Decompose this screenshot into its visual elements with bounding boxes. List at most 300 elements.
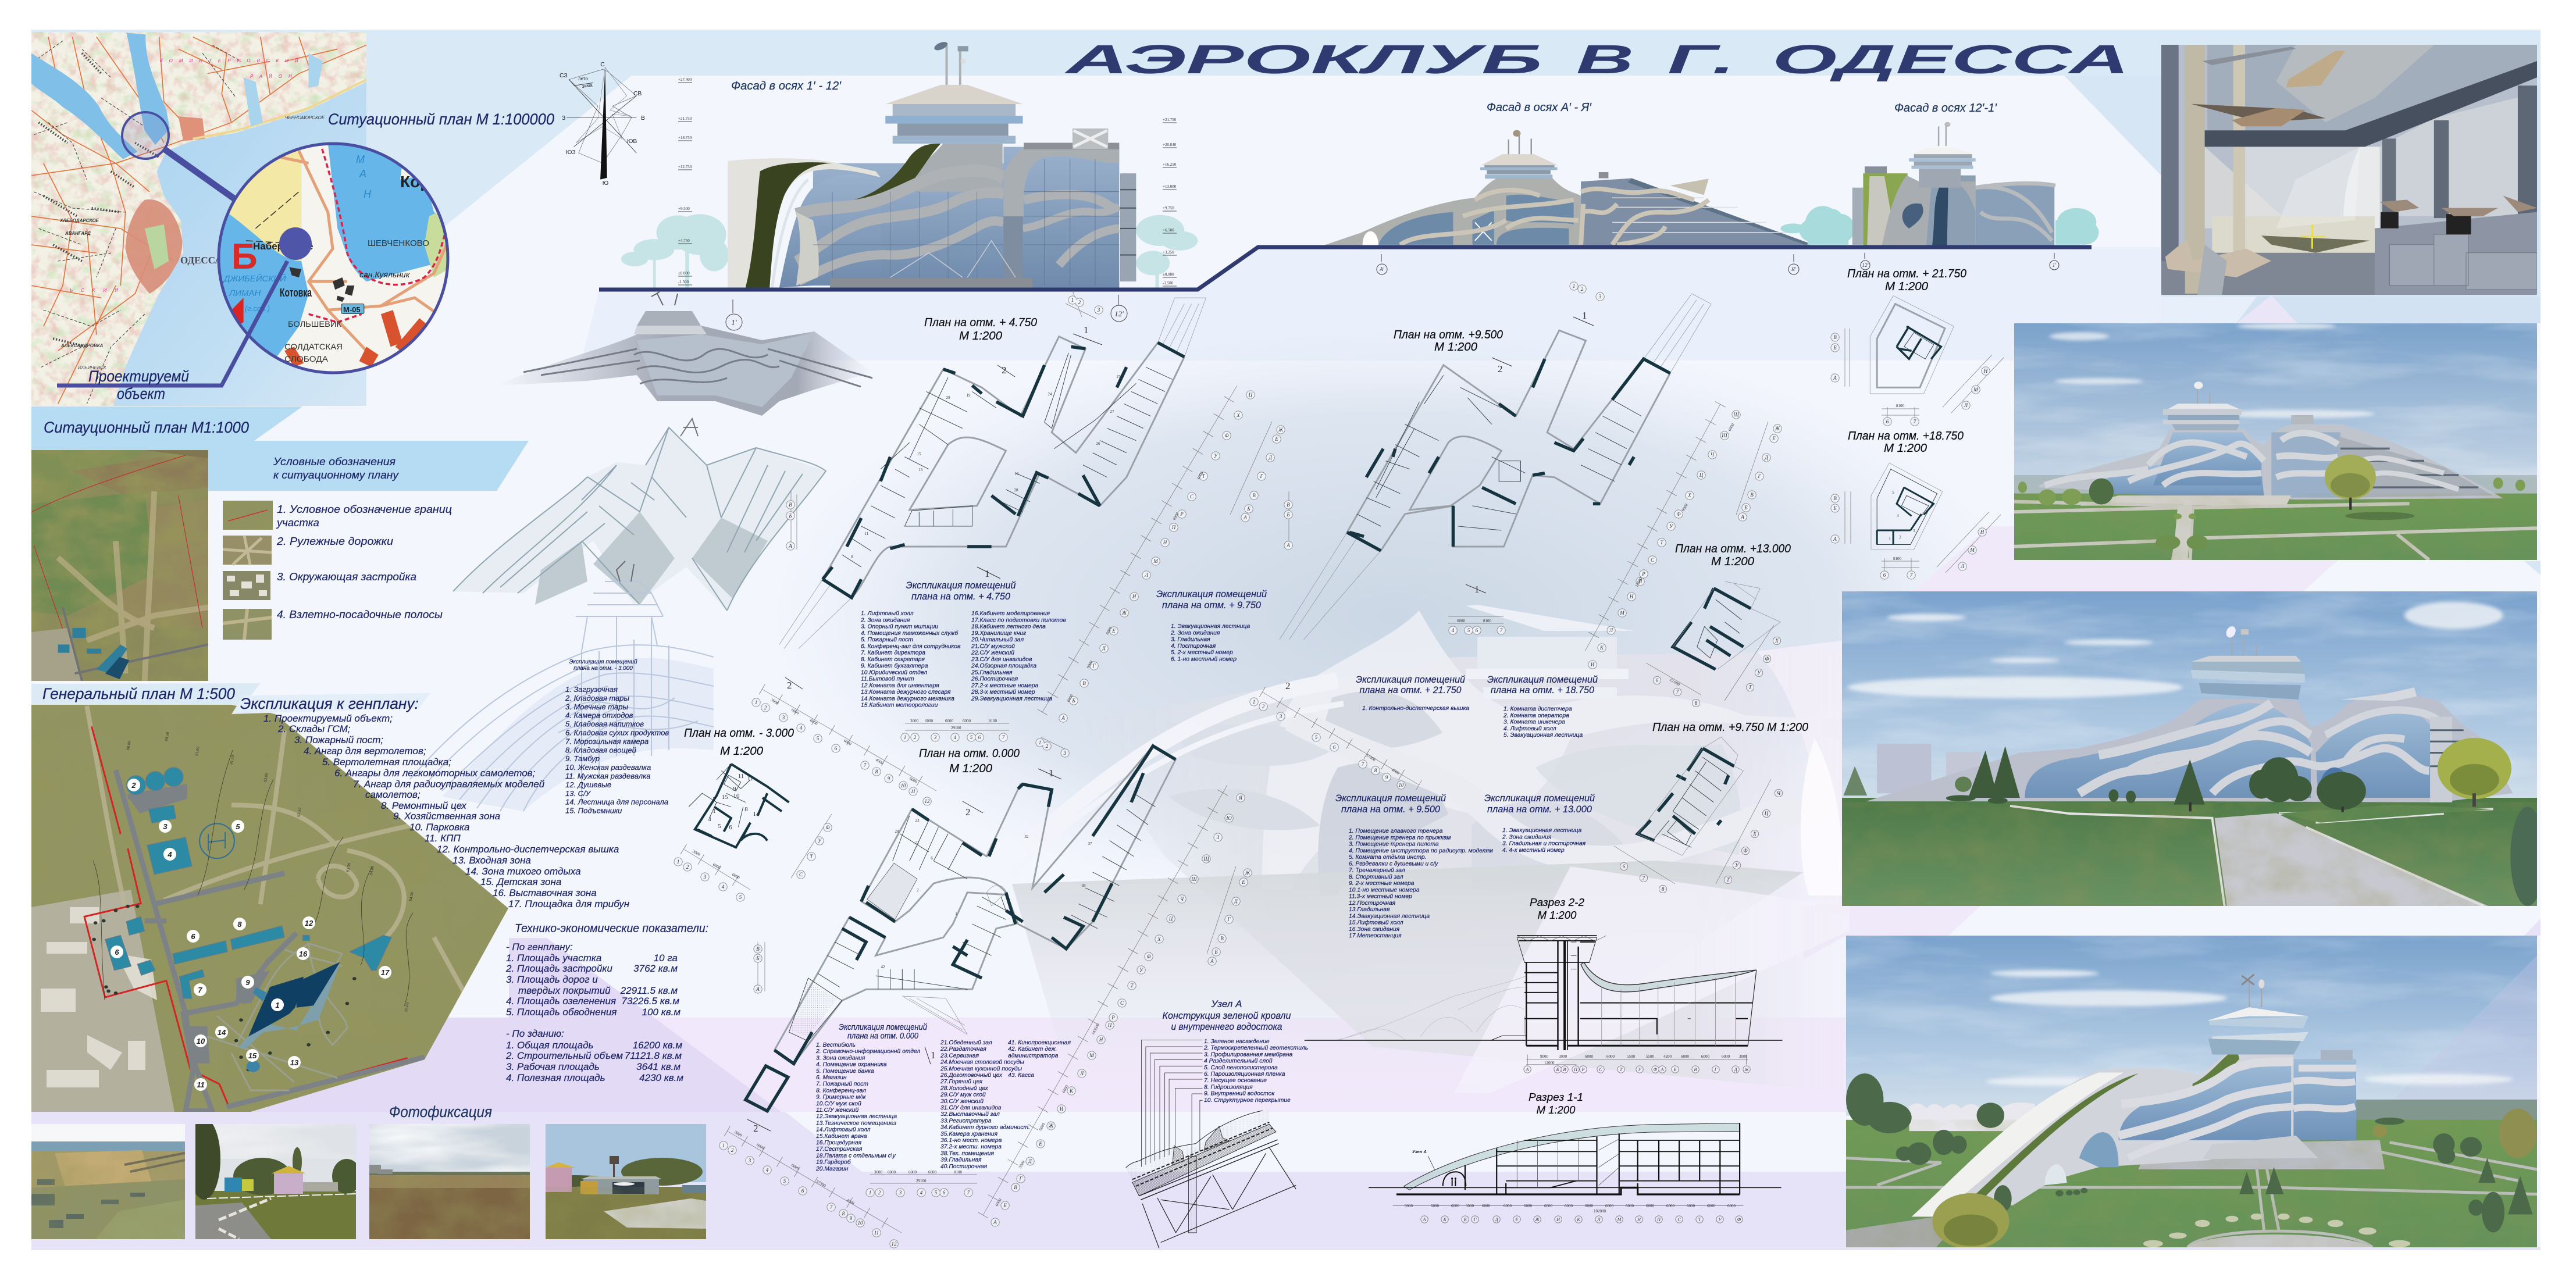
axes: 6000 bbox=[963, 719, 971, 723]
axes: 10 bbox=[1398, 782, 1404, 788]
list: 17. Площадка для трибун bbox=[508, 898, 630, 909]
explication +18.750 bbox=[1487, 674, 1598, 738]
axes: 9000 bbox=[1405, 1204, 1413, 1208]
indicator values: 4230 кв.м bbox=[639, 1072, 683, 1083]
room numbers: 24 bbox=[1048, 392, 1052, 397]
axes: АБВГДЕЖИКЛМНПРСТУФХЦЧШЩЗЮЯ bbox=[993, 795, 1243, 1225]
explication -3.000: 2. Кладовая тары bbox=[565, 694, 630, 702]
axes: 3000 bbox=[733, 1130, 743, 1138]
explication +4.750: Экспликация помещений bbox=[906, 580, 1016, 591]
level marks: +21.750 bbox=[1163, 117, 1177, 122]
wind rose: СВ bbox=[633, 91, 642, 97]
layer list: 4 Разделительный слой bbox=[1204, 1058, 1273, 1065]
list column 2: 17.Класс по подготовки пилотов bbox=[971, 617, 1066, 623]
axes: 12345СТУФ bbox=[677, 825, 830, 900]
room numbers: 5 bbox=[1892, 490, 1894, 495]
explication +13.000 bbox=[1484, 793, 1595, 854]
section markers: 1 bbox=[1049, 768, 1054, 779]
layer list: 7. Несущее основание bbox=[1204, 1078, 1267, 1084]
aerial base with site plan: 82.00 bbox=[263, 772, 269, 782]
list: 5. Вертолетная площадка; bbox=[322, 757, 451, 768]
list column 1: 8. Кабинет секретаря bbox=[861, 656, 925, 663]
explication +13.000: 1. Эвакуационная лестница bbox=[1502, 827, 1582, 834]
floor plan -3.000 bbox=[677, 726, 832, 900]
list: 16. Выставочная зона bbox=[493, 887, 597, 898]
indicator labels: 1. Площадь участка bbox=[506, 952, 601, 964]
explication +13.000: 4. 4-х местный номер bbox=[1502, 847, 1565, 854]
heading bbox=[919, 747, 1020, 775]
list column 1: 15.Кабинет врача bbox=[816, 1133, 867, 1140]
icon: site marker with leader line bbox=[57, 227, 312, 386]
zoomed map circle: А bbox=[359, 168, 366, 180]
floor plan +13.000 bbox=[1646, 542, 1791, 706]
numbered badges: 4 bbox=[167, 850, 172, 859]
axes bbox=[1526, 1054, 1749, 1072]
axes: АБВПРСТУФАБВГДЖ bbox=[1526, 1067, 1749, 1072]
layer list: 8. Гидроизоляция bbox=[1204, 1084, 1253, 1090]
axes: 6000 bbox=[1585, 1054, 1594, 1059]
level marks: +16.250 bbox=[1163, 162, 1177, 167]
zoomed map circle: сан.Куяльник bbox=[359, 270, 411, 279]
axes: 6000 bbox=[1626, 1204, 1634, 1208]
aerial base with site plan: 81.50 bbox=[229, 755, 236, 765]
list column 2: 35.Камера хранения bbox=[940, 1131, 998, 1137]
room numbers: 2 bbox=[712, 796, 716, 803]
layer list: 1. Зеленое насаждение bbox=[1204, 1039, 1270, 1045]
room numbers: 15 bbox=[721, 794, 728, 801]
facade axis markers: 1′ bbox=[2053, 262, 2057, 268]
level marks bbox=[678, 77, 1177, 286]
list column 1: 14.Лифтовый холл bbox=[816, 1126, 871, 1133]
axes: 8100 bbox=[989, 719, 997, 723]
explication +18.750: 4. Лифтовый холл bbox=[1503, 725, 1556, 732]
aerial base with site plan bbox=[31, 705, 508, 1112]
axes: 6000 bbox=[1544, 1204, 1553, 1208]
list column 2: 37.2-х мести. номера bbox=[940, 1144, 1002, 1150]
list column 1: 3. Опорный пункт милиции bbox=[861, 623, 938, 630]
numbered badges: 6 bbox=[191, 932, 195, 941]
photo 1: aerial bbox=[31, 1124, 185, 1239]
axes: 10 bbox=[857, 1220, 863, 1226]
room numbers bbox=[708, 773, 760, 831]
axes: 6000 bbox=[1451, 1204, 1460, 1208]
list column 1: 2. Справочно-информационнй отдел bbox=[815, 1048, 920, 1055]
list column 2: 16.Кабинет моделирования bbox=[971, 610, 1050, 617]
explication -3.000: 8. Кладовая овощей bbox=[565, 745, 636, 754]
list: 14. Зона тихого отдыха bbox=[465, 866, 581, 877]
indicator labels: 4. Полезная площадь bbox=[506, 1072, 605, 1083]
list: 10. Парковка bbox=[409, 822, 469, 833]
axes: 11 bbox=[874, 1230, 879, 1236]
heading bbox=[1530, 896, 1585, 921]
list column 1: 14.Комната дежурного механика bbox=[861, 695, 954, 702]
indicator labels: 3. Рабочая площадь bbox=[506, 1061, 600, 1072]
indicator values: 73226.5 кв.м bbox=[622, 996, 679, 1007]
list column 1: 7. Кабинет директора bbox=[861, 649, 925, 656]
facade drawing bbox=[1323, 130, 1848, 246]
explication +13.000: Экспликация помещений bbox=[1484, 793, 1595, 804]
axes: 9000 bbox=[1540, 1054, 1548, 1059]
axes: 1234567 bbox=[904, 734, 1005, 740]
isometric view 2 bbox=[453, 419, 826, 611]
zoomed map circle: ШЕВЧЕНКОВО bbox=[368, 238, 429, 248]
legend text: 1. Условное обозначение границ bbox=[277, 503, 452, 515]
explication +18.750: плана на отм. + 18.750 bbox=[1491, 684, 1595, 695]
indicator labels: 1. Общая площадь bbox=[506, 1040, 593, 1051]
wind rose: З bbox=[562, 115, 565, 122]
list column 1: 10.С/У муж ской bbox=[816, 1101, 861, 1107]
title: АЭРОКЛУБ bbox=[1064, 37, 1542, 82]
list column 1: 4. Помещения таможенных служб bbox=[861, 630, 959, 637]
explication -3.000: 7. Морозильная камера bbox=[565, 737, 649, 745]
explication +4.750: плана на отм. + 4.750 bbox=[911, 591, 1011, 602]
map labels: ИЛЬИЧЕВСК bbox=[78, 365, 107, 370]
axes: 6000 bbox=[1701, 1054, 1710, 1059]
explication +18.750: Экспликация помещений bbox=[1487, 674, 1598, 685]
facade drawing bbox=[1805, 122, 2099, 245]
zoomed map circle: СЛОБОДА bbox=[284, 354, 329, 363]
explication -3.000: 6. Кладовая сухих продуктов bbox=[565, 728, 669, 737]
map labels: ЬСКИЙ bbox=[70, 288, 126, 293]
list column 2: 40.Постирочная bbox=[940, 1164, 988, 1170]
axes bbox=[755, 291, 1284, 804]
indicator values: 10 га bbox=[654, 952, 678, 964]
axes: 6000 bbox=[731, 872, 741, 880]
list column 2: 27.2-х местные номера bbox=[971, 683, 1039, 689]
axes: 123 bbox=[1573, 283, 1602, 299]
heading: М 1:200 bbox=[959, 329, 1003, 342]
level marks: +27.400 bbox=[678, 77, 692, 82]
facade base line bbox=[599, 247, 2092, 290]
explication +9.750: Экспликация помещений bbox=[1156, 588, 1267, 600]
list bbox=[263, 713, 630, 909]
heading banner: Экспликация к генплану: bbox=[240, 695, 419, 712]
zoomed map circle: БОЛЬШЕВИК bbox=[288, 319, 342, 329]
heading: Конструкция зеленой кровли bbox=[1162, 1010, 1291, 1021]
axes: 102000 bbox=[1594, 1209, 1606, 1214]
list column 1: 16.Процедурная bbox=[816, 1140, 862, 1146]
axes: 6000 bbox=[1681, 1054, 1689, 1059]
swatch 2: taxiways bbox=[223, 536, 272, 565]
explication +9.500: 6. Раздевалки с душевыми и с/у bbox=[1349, 861, 1438, 867]
facade 12-1 bbox=[1805, 101, 2099, 245]
axes: 8100 bbox=[1893, 556, 1902, 561]
explication -3.000: 3. Моечные тары bbox=[565, 702, 628, 711]
isometric view 3 bbox=[410, 561, 714, 811]
axes: 4200 bbox=[1663, 1054, 1672, 1059]
room numbers bbox=[851, 374, 1121, 559]
explication +13.000: плана на отм. + 13.000 bbox=[1487, 804, 1592, 815]
plan drawing bbox=[1871, 463, 1943, 550]
swatch 1: site boundary bbox=[223, 501, 273, 530]
heading: М 1:200 bbox=[1885, 280, 1929, 293]
numbered badges: 10 bbox=[197, 1037, 205, 1046]
list column 2: 21.Обеденный зал bbox=[940, 1039, 992, 1046]
heading bbox=[1529, 1091, 1583, 1116]
explication +9.750 bbox=[1156, 588, 1267, 662]
explication +9.750: 5. 2-х местный номер bbox=[1171, 650, 1233, 656]
room numbers: 1 bbox=[955, 911, 957, 916]
explication +9.750: 3. Гладильная bbox=[1171, 636, 1210, 643]
heading: М 1:200 bbox=[720, 744, 764, 758]
axes: ЖЕДГВБА bbox=[1210, 870, 1250, 964]
numbered badges: 15 bbox=[248, 1051, 257, 1060]
axes: 6000 bbox=[1687, 1204, 1695, 1208]
room numbers: 15 bbox=[919, 468, 923, 472]
section markers: 1 bbox=[985, 568, 990, 579]
heading: План на отм. 0.000 bbox=[919, 747, 1020, 760]
explication -3.000: 14. Лестница для персонала bbox=[565, 798, 668, 807]
axes: 6000 bbox=[1646, 1204, 1654, 1208]
axes: 6000 bbox=[928, 1170, 936, 1175]
level marks: +13.000 bbox=[1163, 184, 1177, 189]
explication -3.000: 12. Душевые bbox=[565, 780, 611, 789]
numbered badges: 1 bbox=[275, 1001, 280, 1009]
axes: 3000 bbox=[910, 719, 919, 723]
axes: 5500 bbox=[1627, 1054, 1636, 1059]
floor plan +18.750 bbox=[1833, 429, 2001, 578]
section markers: 2 bbox=[1002, 365, 1006, 376]
list column 2: 32.Выставочный зал bbox=[940, 1111, 1000, 1118]
axes: АБВГДЕЖИКЛМНПСТУФ bbox=[1423, 1217, 1741, 1222]
heading: М 1:200 bbox=[1884, 441, 1927, 455]
heading: и внутреннего водостока bbox=[1171, 1021, 1282, 1032]
explication +21.750: плана на отм. + 21.750 bbox=[1360, 684, 1462, 695]
axes: 3000 bbox=[1018, 1159, 1026, 1169]
floor plan +4.750 bbox=[755, 291, 1284, 804]
axes: 3000 bbox=[770, 698, 780, 706]
list column 2: 23.Сервизная bbox=[940, 1052, 979, 1059]
list column 1: 12.Комната для инвентаря bbox=[861, 683, 939, 689]
heading: situation plan 1:100000: Ситуационный план М 1:100000 bbox=[328, 110, 554, 128]
section drawing bbox=[1369, 1123, 1782, 1205]
explication +13.000: 2. Зона ожидания bbox=[1502, 834, 1552, 840]
axes: 12356789 bbox=[1253, 699, 1388, 780]
aerial base with site plan: 81.00 bbox=[194, 746, 201, 756]
axes: 123 bbox=[1039, 740, 1067, 756]
list column 2: 39.Гладильная bbox=[940, 1157, 982, 1164]
zoomed map circle: Б bbox=[231, 237, 258, 277]
map base bbox=[31, 32, 366, 406]
axes: 4567 bbox=[1452, 627, 1503, 633]
room numbers: 2 bbox=[1899, 535, 1901, 540]
zoomed map circle: М-05 bbox=[343, 305, 361, 314]
axes: 6000 bbox=[712, 862, 722, 870]
list column 2: 22.С/У женский bbox=[971, 650, 1014, 656]
detail node A bbox=[1125, 998, 1308, 1248]
axes bbox=[722, 737, 1250, 1247]
room numbers: 2 bbox=[917, 888, 919, 893]
room numbers: 16 bbox=[1014, 472, 1019, 476]
photo 3: field bbox=[369, 1124, 530, 1239]
list column 2: 24.Моечная столовой посуды bbox=[940, 1059, 1024, 1066]
facade 1-12 bbox=[621, 40, 1198, 288]
explication -3.000: Экспликация помещений bbox=[569, 659, 637, 665]
title: ОДЕССА bbox=[1772, 37, 2129, 82]
map labels: РАЙОН bbox=[250, 74, 298, 79]
axes: 6000 bbox=[908, 1170, 917, 1175]
axes: 3000 bbox=[874, 1170, 883, 1175]
explication +9.750: 4. Постирочная bbox=[1171, 643, 1216, 650]
axes: 12 bbox=[925, 798, 930, 804]
zoomed map circle bbox=[212, 139, 455, 379]
swatch 3: surrounding buildings bbox=[223, 571, 270, 600]
room numbers: 29 bbox=[946, 395, 950, 400]
explication +18.750: 3. Комната инженера bbox=[1503, 719, 1565, 726]
list: 1. Проектируемый объект; bbox=[263, 713, 393, 724]
explication +9.500: 9. 2-х местные номера bbox=[1349, 880, 1415, 887]
heading bbox=[1394, 328, 1503, 354]
axes: 123 bbox=[1071, 297, 1100, 313]
title bbox=[1064, 37, 2129, 82]
room numbers: 19 bbox=[967, 393, 971, 398]
heading: План на отм. - 3.000 bbox=[684, 726, 794, 740]
numbered badges: 12 bbox=[305, 919, 313, 927]
heading: План на отм. +9.750 М 1:200 bbox=[1652, 720, 1809, 734]
axes: 6000 bbox=[790, 708, 800, 716]
heading: М 1:200 bbox=[1711, 555, 1755, 568]
explication +9.500: 13.Гладильная bbox=[1349, 907, 1390, 913]
axes: 57300 bbox=[1365, 753, 1377, 762]
axes: 6000 bbox=[1727, 1204, 1736, 1208]
explication -3.000: 11. Мужская раздевалка bbox=[565, 772, 650, 780]
indicator labels: твердых покрытий bbox=[518, 985, 611, 996]
room numbers: 27 bbox=[1110, 409, 1114, 414]
explication +9.750: 6. 1-но местный номер bbox=[1171, 656, 1237, 662]
numbered badges: 9 bbox=[245, 978, 250, 987]
room numbers: 28 bbox=[895, 829, 899, 834]
room numbers: 6 bbox=[729, 824, 732, 831]
axes: 29100 bbox=[916, 1179, 927, 1183]
title: В bbox=[1576, 37, 1634, 82]
banner: general plan heading: Генеральный план М 1:500 bbox=[42, 685, 235, 702]
level marks: ±0.000 bbox=[1163, 272, 1174, 277]
axes: 8100 bbox=[954, 1170, 962, 1175]
axes: 123456789 bbox=[722, 1143, 853, 1221]
room numbers: 11 bbox=[747, 775, 753, 782]
list column 2: 38.Тех. помещения bbox=[940, 1150, 994, 1157]
plan drawing bbox=[1673, 581, 1780, 669]
label: project site: Проектируемй bbox=[88, 368, 189, 385]
indicator values: 100 кв.м bbox=[642, 1007, 680, 1018]
explication -3.000: 10. Женская раздевалка bbox=[565, 763, 651, 772]
legend text bbox=[276, 503, 452, 620]
list column 2: 21.С/У мужской bbox=[971, 643, 1015, 650]
explication +9.500: 10.1-но местные номера bbox=[1349, 887, 1420, 893]
heading: М 1:200 bbox=[1537, 1104, 1576, 1116]
layer list: 2. Термоскрепеленный геотекстиль bbox=[1203, 1045, 1308, 1051]
room numbers: 42 bbox=[881, 965, 885, 969]
render: main view bbox=[1842, 591, 2537, 906]
section markers bbox=[785, 324, 1102, 691]
wind rose: С bbox=[600, 62, 605, 68]
list column 1: 2. Зона ожидания bbox=[860, 617, 910, 623]
explication +4.750 bbox=[860, 580, 1066, 708]
explication +9.500: 2. Помещение тренера по прыжкам bbox=[1348, 834, 1451, 841]
technical and economic indicators: Технико-экономические показатели: bbox=[515, 922, 708, 935]
level marks: -1.500 bbox=[678, 280, 689, 284]
room numbers: 3 bbox=[1913, 529, 1915, 533]
room numbers: 32 bbox=[1025, 834, 1029, 839]
list: 6. Ангары для легкомоторных самолетов; bbox=[334, 768, 536, 779]
room numbers bbox=[863, 818, 1092, 1039]
axes: 12.000 bbox=[1669, 677, 1681, 687]
floor plan +9.500 bbox=[1253, 283, 1780, 788]
map labels: КОМИНТЕРНОВСКИЙ bbox=[160, 58, 305, 63]
wind rose: ЮВ bbox=[627, 138, 637, 145]
explication -3.000: 5. Кладовая напитков bbox=[565, 720, 644, 729]
axes: 6000 bbox=[1038, 1122, 1046, 1132]
list column 3: администратора bbox=[1008, 1052, 1059, 1059]
panel: general plan bbox=[31, 683, 508, 1112]
axes: 6000 bbox=[1482, 1204, 1490, 1208]
axes: 4500 bbox=[846, 1198, 856, 1206]
explication +21.750 bbox=[1356, 674, 1469, 712]
section markers: 2 bbox=[787, 680, 792, 691]
indicator labels: 2. Строительный объем bbox=[505, 1050, 623, 1061]
banner: situation plan 1:1000 and legend: Условные обозначения bbox=[273, 455, 396, 468]
plan drawing bbox=[689, 764, 789, 847]
list column 3: 41. Кинопроекционная bbox=[1008, 1040, 1071, 1046]
heading: М 1:200 bbox=[1538, 909, 1577, 921]
room numbers: 14 bbox=[753, 811, 760, 818]
aerial base with site plan: 80.00 bbox=[126, 740, 132, 750]
list column 1: 8. Конференц-зал bbox=[816, 1087, 866, 1094]
plan drawing bbox=[1870, 296, 1954, 394]
list: 4. Ангар для вертолетов; bbox=[304, 745, 426, 757]
room numbers: 1 bbox=[712, 808, 716, 815]
list: 3. Пожарный пост; bbox=[294, 734, 383, 745]
list column 1: 10.Юридический отдел bbox=[861, 669, 927, 676]
section markers bbox=[1285, 310, 1594, 691]
list column 1: 11.Бытовой пункт bbox=[861, 676, 914, 683]
panel: aerial photo 1:1000 bbox=[31, 450, 208, 681]
explication +9.500: 1. Помещение главного тренера bbox=[1349, 828, 1443, 834]
aerial base with site plan: 80.50 bbox=[164, 732, 170, 741]
heading: План на отм. +18.750 bbox=[1848, 429, 1964, 443]
list: 7. Ангар для радиоуправляемых моделей bbox=[353, 779, 545, 790]
level marks: +12.750 bbox=[678, 165, 692, 169]
explication +9.500: 17.Метеостанция bbox=[1349, 933, 1402, 939]
axes: 6000 bbox=[888, 1170, 896, 1175]
explication +9.500: 3. Помещение тренера пилота bbox=[1349, 841, 1439, 848]
list: 11. КПП bbox=[425, 833, 461, 844]
layer list: 9. Внутренний водосток bbox=[1204, 1091, 1275, 1097]
room numbers: 5 bbox=[718, 823, 721, 830]
banner: situation plan 1:1000 and legend: к ситуационному плану bbox=[273, 469, 400, 481]
room numbers: 26 bbox=[1096, 441, 1100, 446]
section markers: 2 bbox=[1498, 363, 1503, 374]
axes: 3000 bbox=[1559, 1054, 1567, 1059]
level marks: +9.750 bbox=[1163, 206, 1174, 210]
axes: 143500 bbox=[1091, 1022, 1100, 1036]
room numbers: 23 bbox=[915, 818, 920, 823]
axes: 6000 bbox=[1066, 693, 1074, 703]
list: 13. Входная зона bbox=[453, 855, 531, 866]
explication +9.500: 5. Комната отдыха инстр. bbox=[1349, 854, 1426, 861]
layer list: 10. Структурное перекрытие bbox=[1204, 1097, 1291, 1104]
axes: 8100 bbox=[1483, 619, 1491, 623]
explication +9.500: 7. Тренажерный зал bbox=[1349, 868, 1405, 873]
aerial base with site plan: 84.50 bbox=[408, 891, 415, 901]
legend text: 3. Окружающая застройка bbox=[277, 570, 416, 583]
list: 2. Склады ГСМ; bbox=[277, 723, 351, 734]
axes bbox=[1405, 1204, 1741, 1222]
explication +9.750: 1. Эвакуационная лестница bbox=[1171, 623, 1250, 630]
axes: 10 bbox=[900, 783, 906, 789]
axes: 6000 bbox=[1086, 659, 1094, 669]
floor plan +9.750 bbox=[1614, 720, 1809, 892]
